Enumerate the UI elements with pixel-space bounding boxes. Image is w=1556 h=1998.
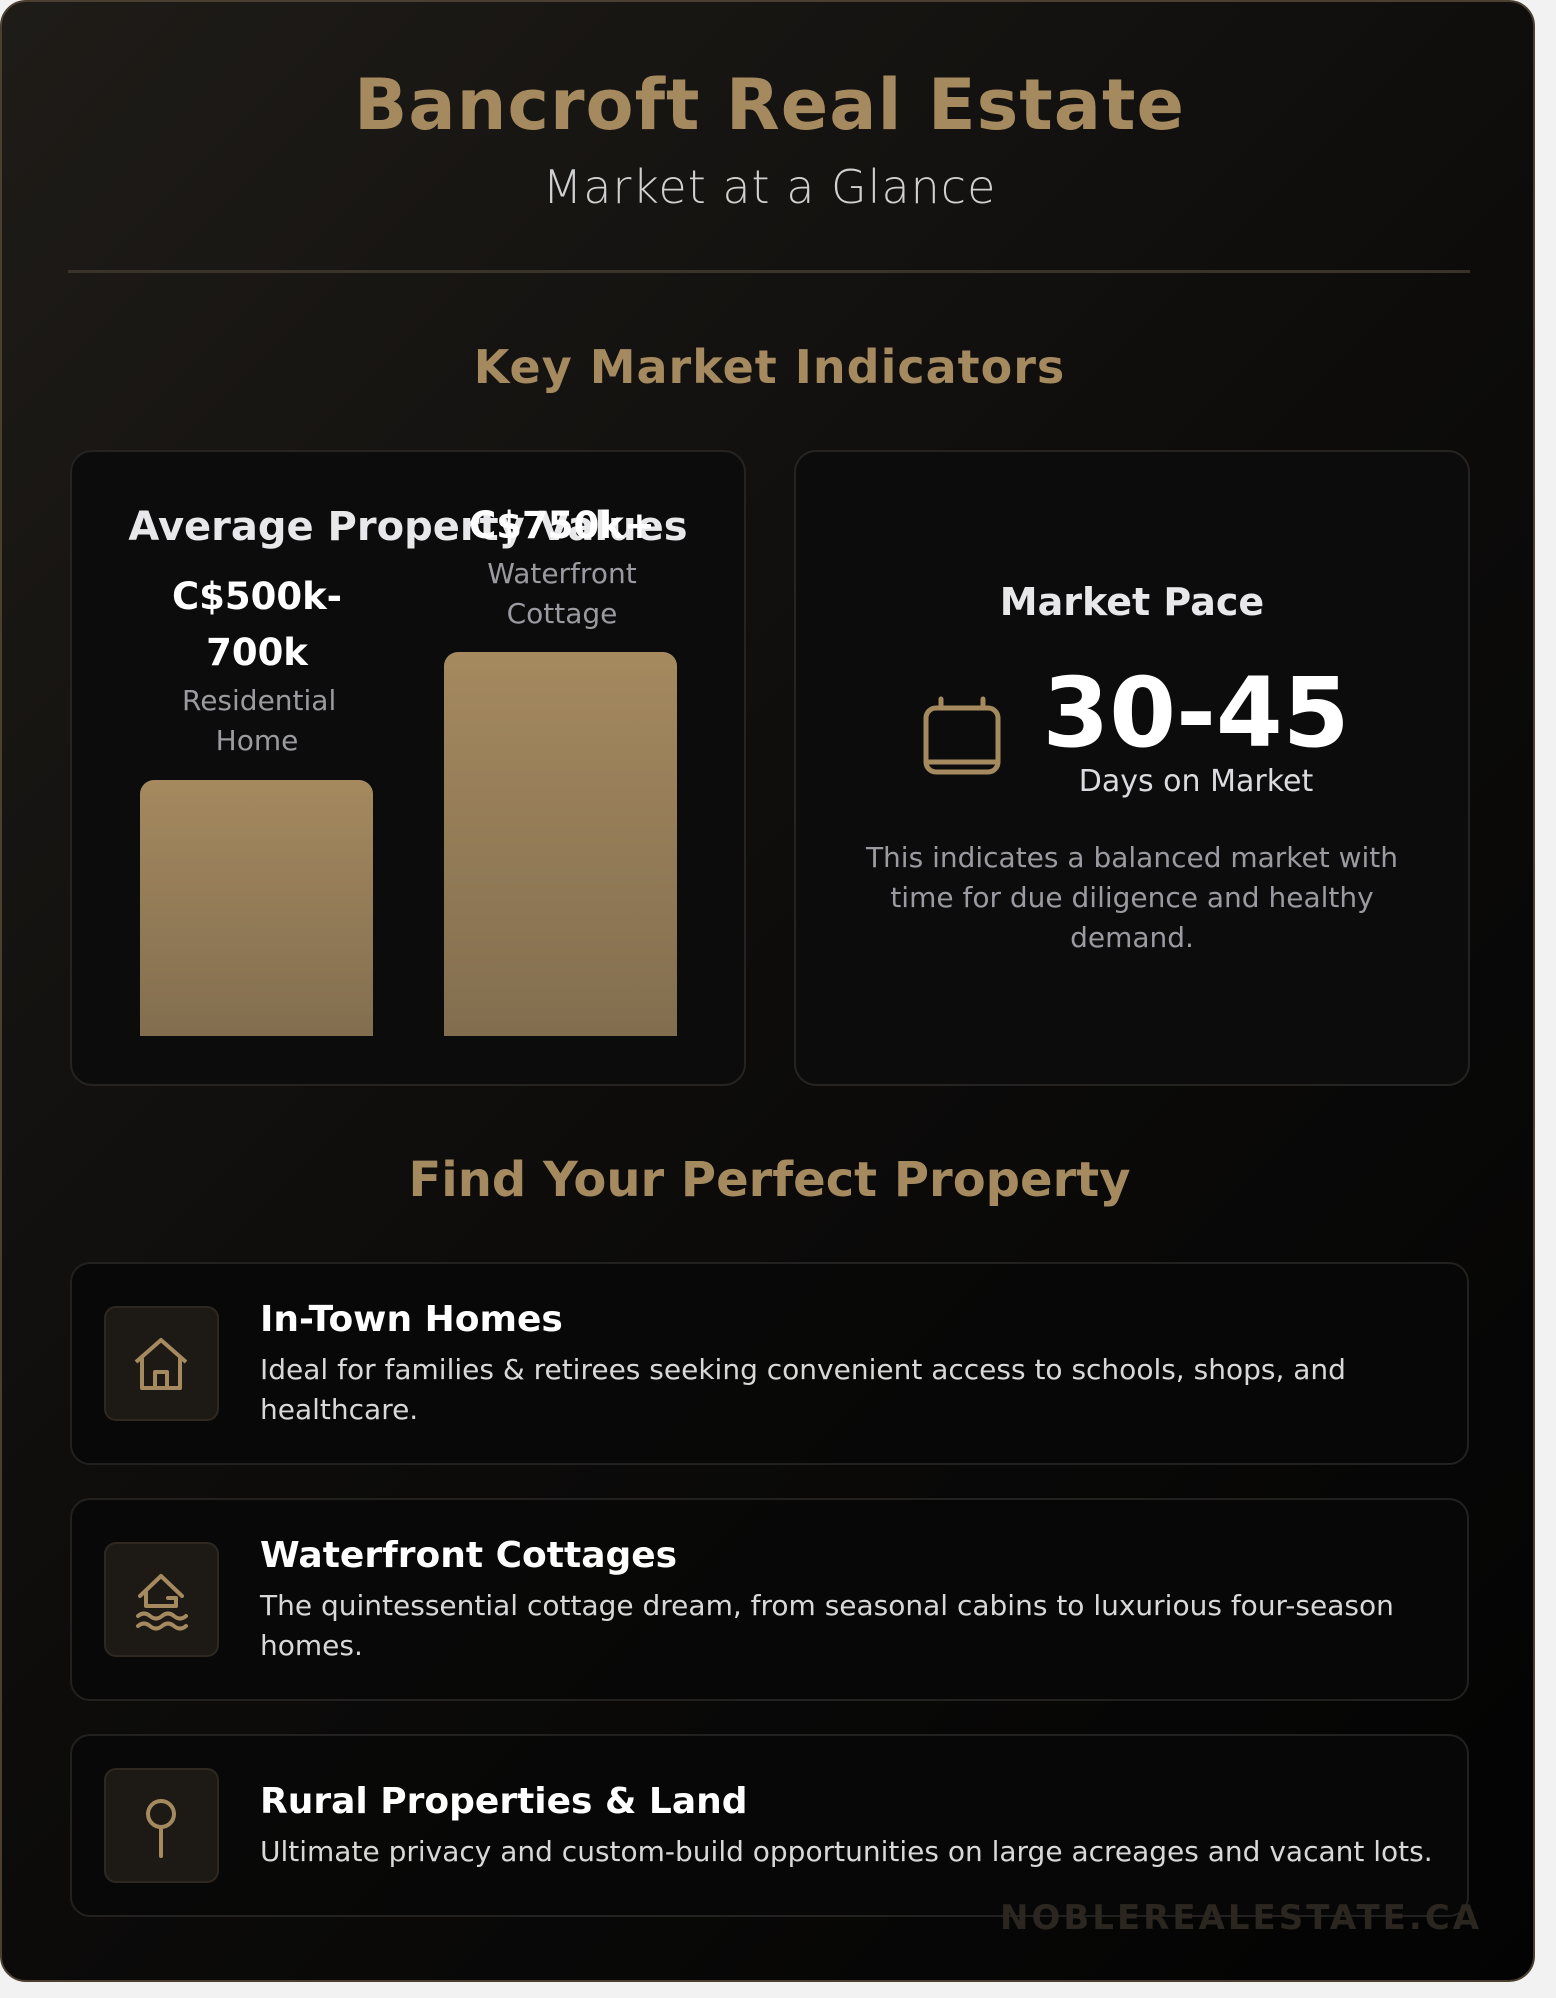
icon: cottage on water bbox=[104, 1542, 219, 1657]
row: waterfront cottages: Waterfront Cottages bbox=[260, 1535, 677, 1576]
row: rural properties bbox=[70, 1734, 1469, 1917]
row: in-town homes: In-Town Homes bbox=[260, 1299, 563, 1340]
heading: key market indicators: Key Market Indicators bbox=[474, 340, 1065, 394]
chart heading: Average Property Values bbox=[128, 504, 688, 550]
row: rural properties: Ultimate privacy and custom-build opportunities on large acreages and vacant lots. bbox=[260, 1835, 1433, 1868]
row: rural properties: Rural Properties & Land bbox=[260, 1781, 748, 1822]
row: in-town homes bbox=[70, 1262, 1469, 1465]
subtitle: Market at a Glance bbox=[543, 160, 996, 214]
panel: average property values bbox=[70, 450, 746, 1086]
stat: 30-45 days: 30-45 bbox=[1042, 657, 1350, 769]
watermark: NOBLEREALESTATE.CA bbox=[1000, 1898, 1482, 1938]
bar: waterfront cottage: Waterfront Cottage bbox=[487, 557, 637, 630]
icon: house bbox=[104, 1306, 219, 1421]
bar: residential home: Residential Home bbox=[182, 684, 336, 757]
description: This indicates a balanced market with time for due diligence and healthy demand. bbox=[866, 841, 1398, 954]
icon: pin bbox=[104, 1768, 219, 1883]
row: in-town homes: Ideal for families & retirees seeking convenient access to schools, shops, and healthcare. bbox=[260, 1353, 1346, 1426]
title: Bancroft Real Estate bbox=[354, 64, 1185, 146]
row: waterfront cottages bbox=[70, 1498, 1469, 1701]
bar: residential home: C$500k-700k bbox=[172, 575, 342, 674]
heading: find your perfect property: Find Your Perfect Property bbox=[409, 1152, 1130, 1208]
heading: market pace: Market Pace bbox=[1000, 580, 1264, 624]
stat: 30-45 days: Days on Market bbox=[1079, 764, 1313, 799]
bar: waterfront cottage: C$750k+ bbox=[469, 504, 655, 547]
row: waterfront cottages: The quintessential cottage dream, from seasonal cabins to luxurious four-season homes. bbox=[260, 1589, 1394, 1662]
bar: residential home bbox=[172, 575, 342, 757]
bar: waterfront cottage bbox=[469, 504, 655, 630]
icon: calendar bbox=[924, 696, 1000, 774]
panel: market pace bbox=[794, 450, 1470, 1086]
